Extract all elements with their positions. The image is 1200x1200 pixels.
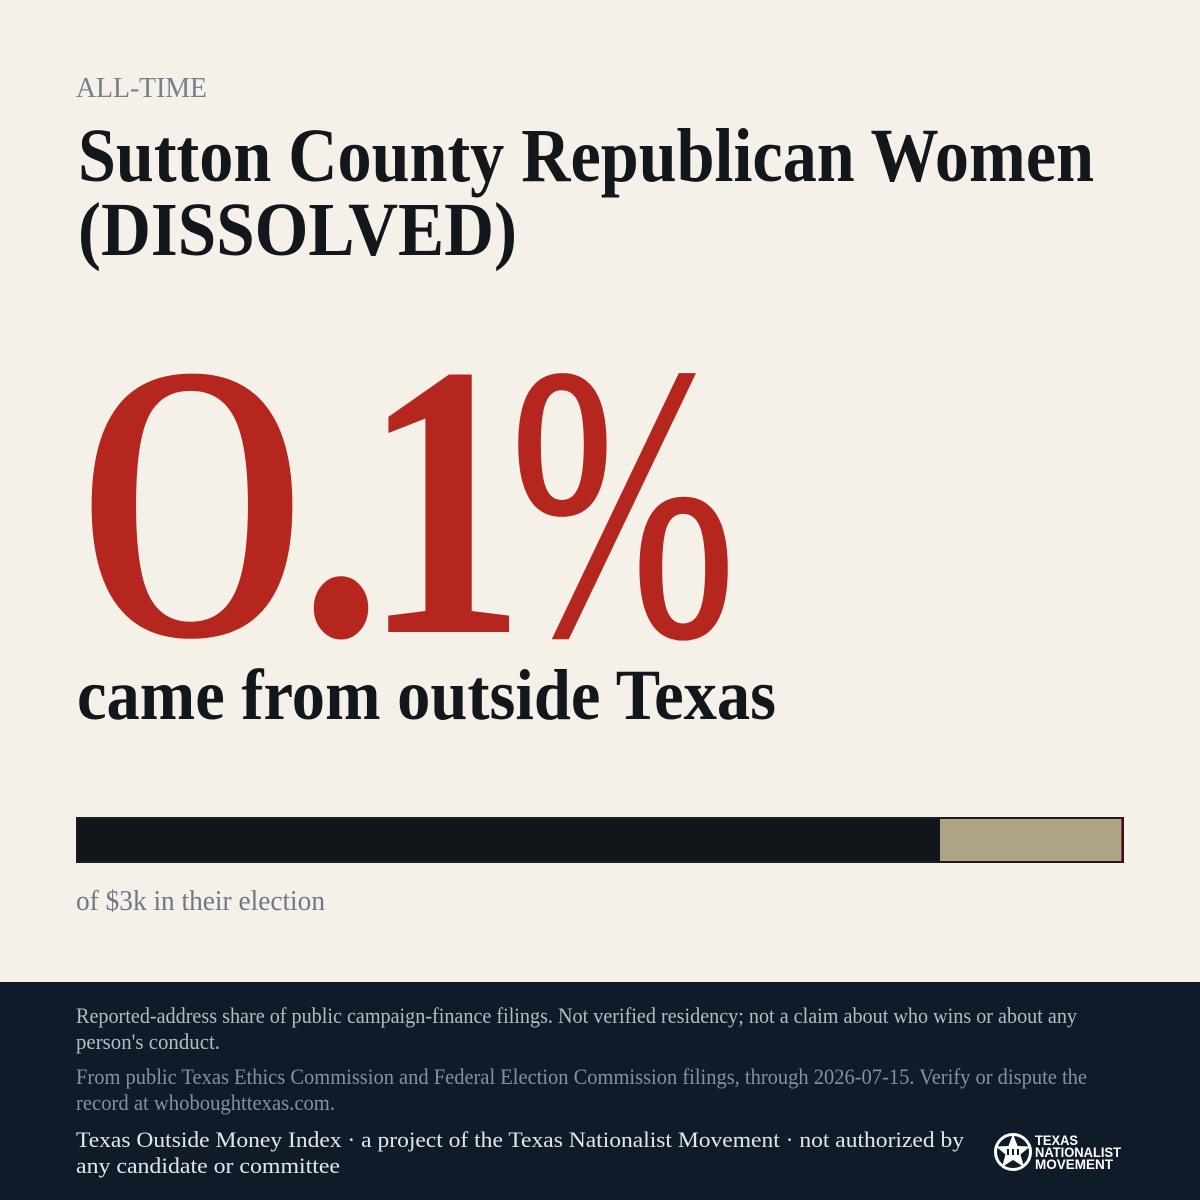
disclaimer text: person's conduct. — [76, 1029, 220, 1054]
big percentage: 0 — [75, 287, 309, 719]
big percentage: % — [510, 287, 736, 719]
title: Sutton County Republican Women — [78, 114, 1094, 198]
big percentage: . — [299, 287, 383, 719]
icon: Texas Nationalist Movement logo: MOVEMENT — [1035, 1157, 1114, 1172]
bar caption: of $3k in their election — [76, 885, 325, 917]
icon: Texas Nationalist Movement logo: NATIONALIST — [1035, 1145, 1122, 1160]
title — [78, 114, 1094, 272]
source text — [76, 1064, 1087, 1115]
disclaimer text — [76, 1003, 1077, 1054]
subheading: came from outside Texas — [77, 655, 776, 735]
icon: Texas Nationalist Movement logo — [996, 1133, 1122, 1172]
project attribution — [76, 1127, 964, 1178]
icon: Texas Nationalist Movement logo: TEXAS — [1035, 1133, 1078, 1148]
disclaimer text: Reported-address share of public campaign-finance filings. Not verified residency; not a claim about who wins or about any — [76, 1003, 1077, 1028]
big percentage — [75, 285, 736, 719]
progress bar — [76, 817, 1124, 863]
source text: record at whoboughttexas.com. — [76, 1090, 335, 1115]
big percentage: 1 — [362, 285, 526, 717]
eyebrow label: ALL-TIME — [76, 72, 207, 104]
footer panel — [0, 982, 1200, 1200]
title: (DISSOLVED) — [78, 188, 517, 272]
source text: From public Texas Ethics Commission and Federal Election Commission filings, through 2026-07-15. Verify or dispute the — [76, 1064, 1087, 1089]
project attribution: any candidate or committee — [76, 1153, 340, 1178]
project attribution: Texas Outside Money Index · a project of the Texas Nationalist Movement · not authorized by — [76, 1127, 964, 1152]
